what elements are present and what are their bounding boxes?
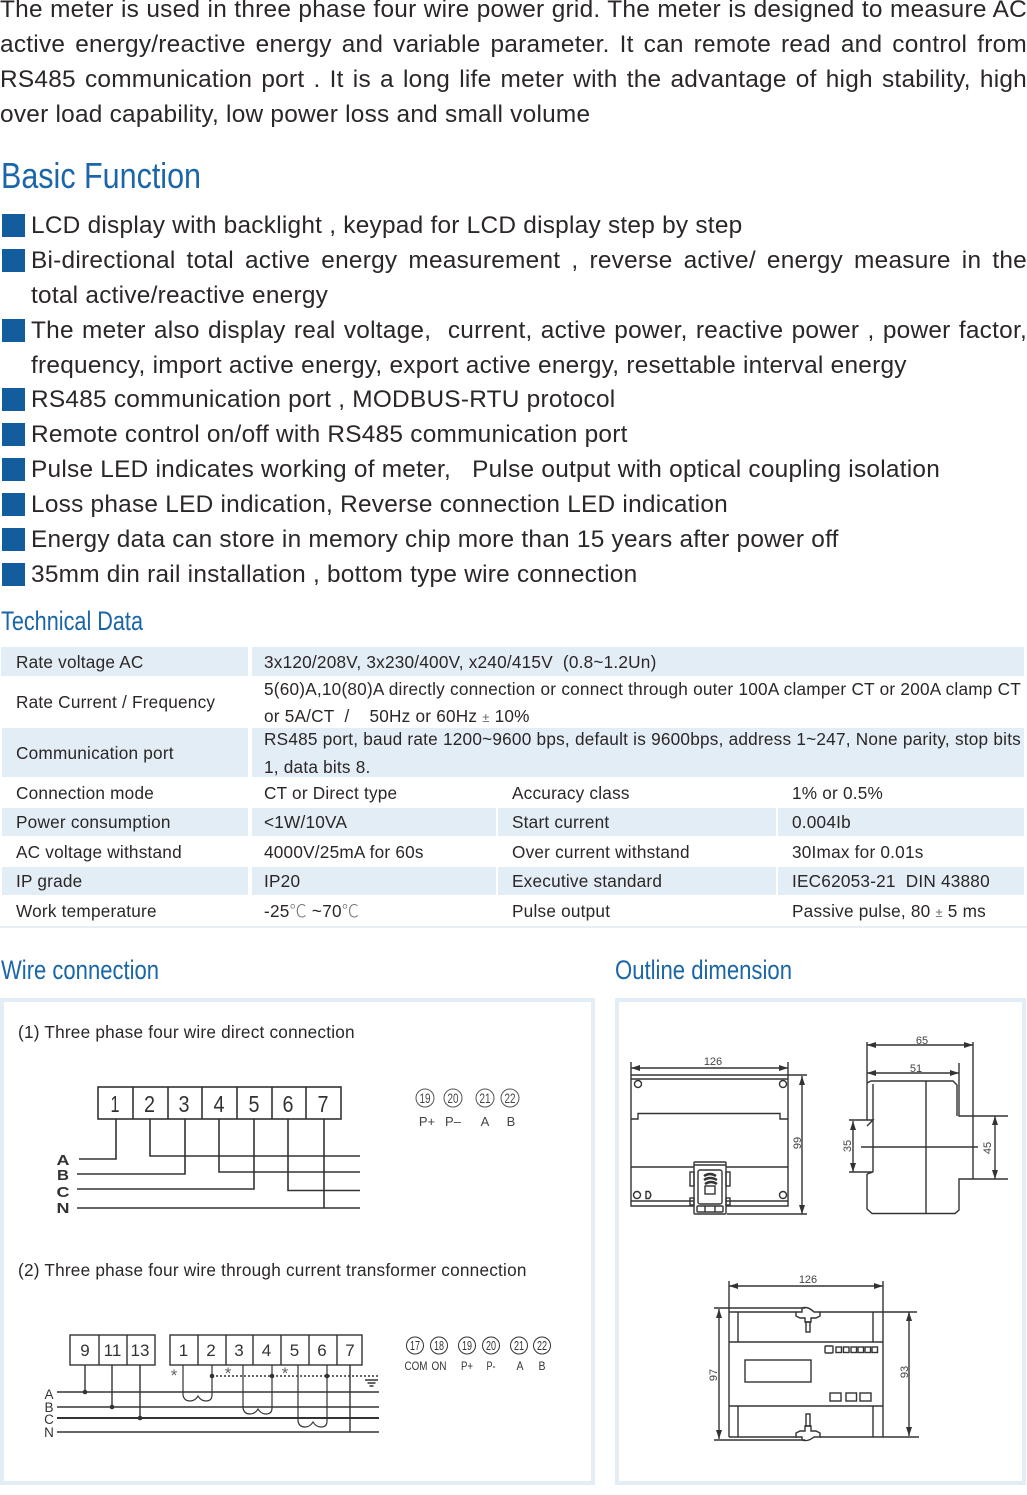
bullet: bi-directional energy: total active/reactive energy [31,282,328,309]
drawing: side view [842,1035,1008,1214]
diagram: current transformer wiring [44,1334,551,1440]
diagram: current transformer wiring: 6 [317,1341,327,1360]
drawing: bottom view: 97 [708,1369,720,1381]
diagram: direct connection wiring: P+ [419,1114,435,1129]
diagram: current transformer wiring: 11 [104,1341,121,1360]
heading: Technical Data: Technical Data [1,606,144,636]
diagram: current transformer wiring: 20 [486,1338,496,1353]
row: rate voltage: 3x120/208V, 3x230/400V, x240/415V (0.8~1.2Un) [264,652,657,672]
row: AC voltage withstand: Over current withstand [512,842,690,862]
row: connection mode: Connection mode [16,783,154,803]
row: work temperature: -25℃ ~70℃ [264,901,359,921]
row: communication port: 1, data bits 8. [264,757,370,777]
row: IP grade [2,867,1024,895]
row: communication port: Communication port [16,743,174,763]
diagram: current transformer wiring: * [225,1364,232,1383]
row: rate voltage [1,647,1024,676]
row: power consumption [2,808,1024,836]
drawing: side view: 51 [910,1063,922,1075]
basic function list [2,212,1027,588]
drawing: front view [630,1056,807,1215]
diagram: current transformer wiring: 1 [179,1341,188,1360]
drawing: side view: 35 [842,1140,854,1152]
diagram: direct connection wiring: B [57,1167,69,1184]
diagram: current transformer wiring: 13 [131,1341,149,1360]
heading: Basic Function: Basic Function [1,155,201,196]
drawing: front view: 126 [704,1056,722,1068]
bullet: energy data: Energy data can store in memory chip more than 15 years after power off [31,526,839,553]
row: IP grade: IP20 [264,871,300,891]
row: rate voltage: Rate voltage AC [16,652,144,672]
row: rate current: or 5A/CT / 50Hz or 60Hz ± 10% [264,706,530,726]
diagram: current transformer wiring: 4 [262,1341,271,1360]
bullet: remote control: Remote control on/off with RS485 communication port [31,421,628,448]
drawing: bottom view [708,1274,919,1442]
bullet: LCD display: LCD display with backlight , keypad for LCD display step by step [31,212,742,239]
row: rate current [16,679,1021,726]
row: AC voltage withstand: AC voltage withstand [16,842,182,862]
diagram: current transformer wiring: COM [404,1359,428,1373]
row: work temperature: Passive pulse, 80 ± 5 ms [792,901,986,921]
caption: current transformer connection: (2) Three phase four wire through current transformer connection [18,1260,527,1280]
diagram: direct connection wiring: P– [445,1114,462,1129]
row: communication port: RS485 port, baud rate 1200~9600 bps, default is 9600bps, address 1~247, None parity, stop bits [264,729,1021,749]
bullet: real-time display [2,317,1027,379]
diagram: current transformer wiring: 18 [434,1338,444,1353]
diagram: current transformer wiring: 5 [290,1341,299,1360]
technical data table [0,647,1027,928]
diagram: current transformer wiring: B [44,1400,54,1415]
drawing: side view: 45 [982,1142,994,1154]
diagram: direct connection wiring: 6 [282,1091,294,1117]
panel: outline dimension [615,998,1026,1485]
row: rate current: 5(60)A,10(80)A directly connection or connect through outer 100A clamper CT or 200A clamp CT [264,679,1021,699]
diagram: current transformer wiring: A [516,1359,524,1373]
diagram: direct connection wiring: 19 [420,1090,431,1106]
drawing: bottom view: 126 [799,1274,817,1286]
row: IP grade: IEC62053-21 DIN 43880 [792,871,990,891]
bullet: loss phase LED: Loss phase LED indication, Reverse connection LED indication [31,491,728,518]
diagram: current transformer wiring: B [538,1359,546,1373]
diagram: current transformer wiring: 19 [462,1338,472,1353]
row: connection mode [16,783,883,803]
row: power consumption: Start current [512,812,609,832]
diagram: direct connection wiring: 1 [110,1091,120,1117]
diagram: current transformer wiring: 22 [537,1338,547,1353]
diagram: current transformer wiring: 9 [80,1341,90,1360]
row: work temperature [0,896,1027,928]
bullet: RS485: RS485 communication port , MODBUS-RTU protocol [31,386,615,413]
diagram: current transformer wiring: 3 [234,1341,244,1360]
diagram: direct connection wiring: B [507,1114,515,1129]
row: rate current: Rate Current / Frequency [16,692,215,712]
diagram: current transformer wiring: 21 [514,1338,524,1353]
row: connection mode: CT or Direct type [264,783,397,803]
row: power consumption: Power consumption [16,812,171,832]
intro paragraph [0,0,1027,128]
drawing: bottom view: 93 [899,1366,911,1378]
bullet: real-time display: frequency, import active energy, export active energy, resettable interval energy [31,352,907,379]
bullet: pulse LED: Pulse LED indicates working of meter, Pulse output with optical coupling isolation [31,456,940,483]
diagram: current transformer wiring: 2 [206,1341,216,1360]
row: AC voltage withstand: 30Imax for 0.01s [792,842,924,862]
row: work temperature: Pulse output [512,901,610,921]
bullet: real-time display: The meter also display real voltage, current, active power, reactive power , power factor, [31,317,1027,344]
diagram: direct connection wiring: 4 [214,1091,225,1117]
diagram: current transformer wiring: * [171,1366,178,1385]
diagram: current transformer wiring: C [44,1412,54,1427]
diagram: direct connection wiring: 7 [318,1091,328,1117]
diagram: current transformer wiring: A [44,1387,54,1402]
bullet: bi-directional energy: Bi-directional total active energy measurement , reverse active/ energy measure in the [31,247,1027,274]
intro paragraph: over load capability, low power loss and small volume [0,101,590,128]
row: connection mode: Accuracy class [512,783,630,803]
diagram: direct connection wiring: 22 [504,1090,516,1106]
row: power consumption: <1W/10VA [264,812,347,832]
heading: Wire connection: Wire connection [1,955,159,985]
row: AC voltage withstand: 4000V/25mA for 60s [264,842,424,862]
diagram: current transformer wiring: 17 [410,1338,420,1353]
diagram: direct connection wiring: N [56,1200,70,1217]
diagram: current transformer wiring: 7 [345,1341,355,1360]
diagram: direct connection wiring: 21 [480,1090,491,1106]
diagram: direct connection wiring [56,1086,520,1217]
caption: direct connection: (1) Three phase four wire direct connection [18,1022,355,1042]
row: power consumption: 0.004Ib [792,812,851,832]
row: IP grade: IP grade [16,871,82,891]
drawing: side view: 65 [916,1035,928,1047]
diagram: current transformer wiring: P+ [461,1359,473,1373]
diagram: direct connection wiring: A [481,1114,490,1129]
row: IP grade: Executive standard [512,871,662,891]
bullet: din rail: 35mm din rail installation , bottom type wire connection [31,561,637,588]
row: communication port [2,728,1024,777]
row: work temperature: Work temperature [16,901,157,921]
diagram: direct connection wiring: 3 [178,1091,190,1117]
diagram: direct connection wiring: C [56,1184,70,1201]
diagram: current transformer wiring: N [44,1425,54,1440]
drawing: front view: 99 [792,1137,804,1149]
row: connection mode: 1% or 0.5% [792,783,883,803]
diagram: current transformer wiring: * [282,1364,289,1383]
heading: Outline dimension: Outline dimension [615,955,792,985]
diagram: direct connection wiring: 2 [144,1091,155,1117]
diagram: current transformer wiring: ON [432,1359,446,1373]
row: AC voltage withstand [16,842,924,862]
panel: wire connection [0,998,595,1485]
intro paragraph: RS485 communication port . It is a long life meter with the advantage of high stability, high [0,66,1027,93]
diagram: direct connection wiring: 5 [248,1091,260,1117]
diagram: current transformer wiring: P- [486,1359,496,1373]
diagram: direct connection wiring: 20 [448,1090,459,1106]
intro paragraph: active energy/reactive energy and variable parameter. It can remote read and control from [0,31,1027,58]
diagram: direct connection wiring: A [56,1152,70,1169]
bullet: bi-directional energy [2,247,1027,309]
